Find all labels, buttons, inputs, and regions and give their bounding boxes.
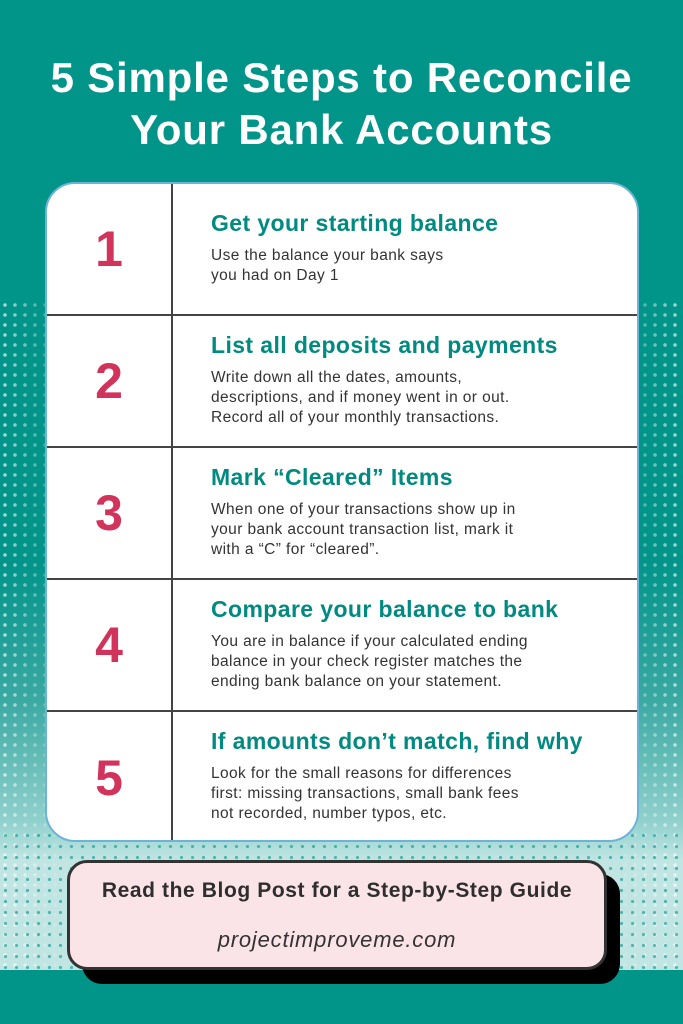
step 1: Get your starting balance [211,210,498,236]
step 3: Mark “Cleared” Items [211,464,453,490]
step 1: Use the balance your bank says [211,247,444,264]
step 5: first: missing transactions, small bank fees [211,785,519,802]
step 4: You are in balance if your calculated ending [211,633,528,650]
step 1: you had on Day 1 [211,267,339,284]
callout button: Read the Blog Post for a Step-by-Step Guide [102,879,572,902]
step 3: with a “C” for “cleared”. [211,541,379,558]
callout button [67,860,607,970]
step 5: 5 [95,750,123,806]
step 3 [47,448,641,580]
step 4: ending bank balance on your statement. [211,673,502,690]
step 2: List all deposits and payments [211,332,558,358]
step 2: Record all of your monthly transactions. [211,409,499,426]
step 5 [95,712,583,840]
step 3: 3 [95,485,123,541]
step 5: not recorded, number typos, etc. [211,805,447,822]
panel: steps table [45,182,639,842]
title: Your Bank Accounts [130,106,553,153]
callout button: projectimproveme.com [218,927,456,952]
step 5: If amounts don’t match, find why [211,728,583,754]
step 1: 1 [95,221,123,277]
step 2: 2 [95,353,123,409]
step 1 [47,184,641,316]
step 3: your bank account transaction list, mark it [211,521,513,538]
step 4: Compare your balance to bank [211,596,558,622]
step 2: descriptions, and if money went in or out. [211,389,510,406]
step 3: When one of your transactions show up in [211,501,516,518]
step 2 [47,316,641,448]
title [51,54,632,153]
step 2: Write down all the dates, amounts, [211,369,462,386]
step 5: Look for the small reasons for differences [211,765,512,782]
step 4: balance in your check register matches the [211,653,522,670]
step 4: 4 [95,617,123,673]
title: 5 Simple Steps to Reconcile [51,54,632,101]
step 4 [47,580,641,712]
